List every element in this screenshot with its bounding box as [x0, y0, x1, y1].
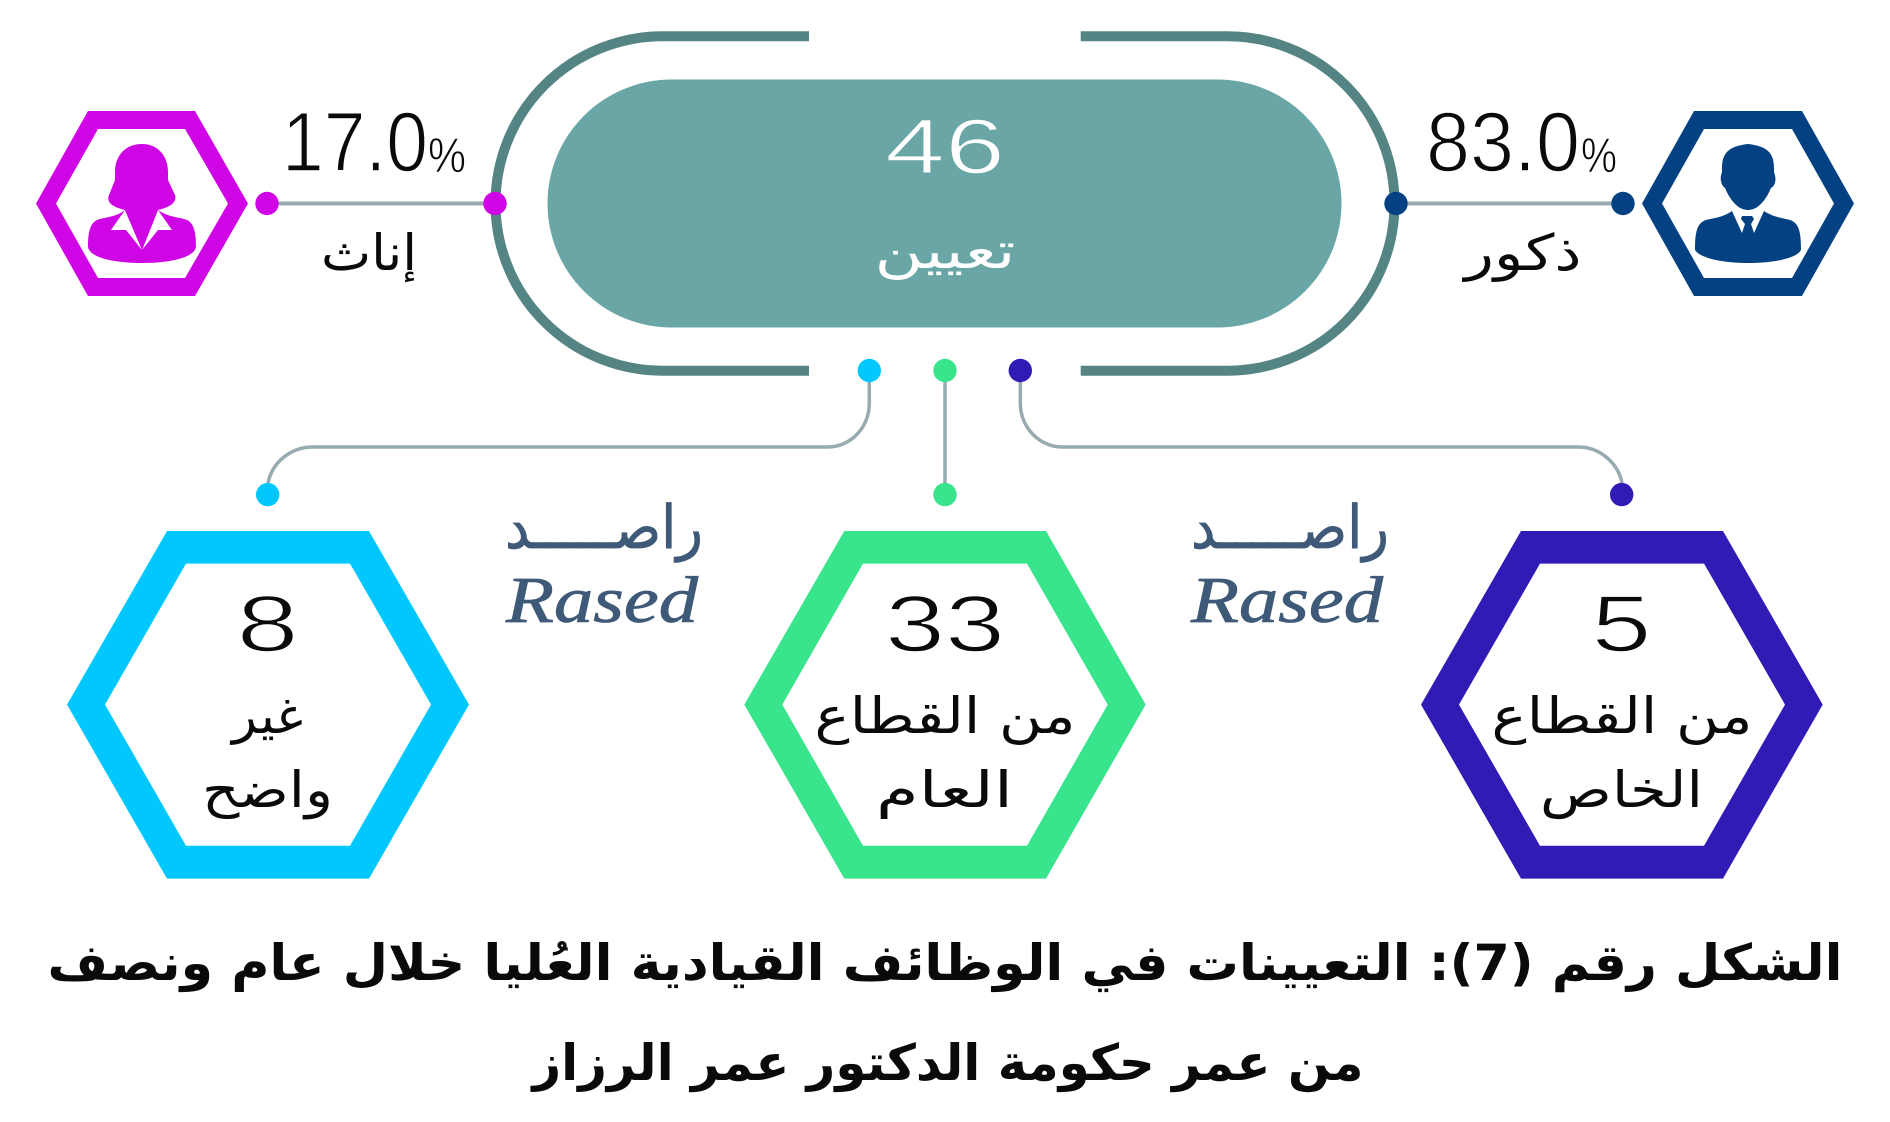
central pill	[548, 80, 1342, 328]
panel: public sector	[744, 531, 1146, 879]
connector dots	[256, 359, 1633, 506]
caption: من عمر حكومة الدكتور عمر الرزاز	[530, 1034, 1364, 1093]
connector line	[267, 202, 495, 206]
female label: إناث	[321, 224, 417, 283]
panel: female share	[36, 95, 507, 296]
label: الخاص	[1540, 761, 1703, 819]
connector lines	[268, 370, 1622, 495]
connector dots	[1384, 192, 1635, 215]
watermark: Rased right: راصـــــد	[1191, 493, 1389, 563]
caption	[48, 934, 1842, 1093]
connector dots	[255, 192, 507, 215]
icon: businesswoman	[88, 144, 196, 263]
female percentage: 17.0	[282, 95, 428, 189]
label	[814, 687, 1076, 819]
icon: male hexagon	[1642, 111, 1854, 296]
panel: private sector	[1421, 531, 1823, 879]
label: من القطاع	[1492, 687, 1752, 745]
panel: central total	[496, 36, 1395, 371]
female percentage: %	[428, 129, 466, 183]
panel: unspecified sector	[67, 531, 469, 879]
label	[1492, 687, 1752, 819]
number 33: 33	[885, 579, 1005, 668]
total number: 46	[885, 102, 1005, 190]
watermark: Rased left	[505, 493, 703, 637]
label	[202, 687, 333, 820]
male percentage: 83.0	[1426, 95, 1580, 189]
connector line	[1396, 202, 1623, 206]
indigo hexagon	[1421, 531, 1823, 879]
label: غير	[229, 687, 303, 745]
icon: businessman	[1695, 144, 1801, 263]
number 8: 8	[237, 579, 299, 668]
male label: ذكور	[1461, 224, 1582, 282]
cyan hexagon	[67, 531, 469, 879]
watermark: Rased left: Rased	[505, 564, 699, 637]
number 5: 5	[1592, 579, 1652, 668]
total label: تعيين	[874, 222, 1016, 280]
label: العام	[876, 761, 1013, 819]
watermark: Rased right	[1190, 493, 1389, 637]
label: من القطاع	[814, 687, 1076, 745]
green hexagon	[744, 531, 1146, 879]
icon: female hexagon	[36, 111, 248, 296]
watermark: Rased right: Rased	[1190, 564, 1384, 637]
male percentage: %	[1581, 129, 1617, 183]
caption: الشكل رقم (7): التعيينات في الوظائف القيادية العُليا خلال عام ونصف	[48, 934, 1842, 993]
outer rounded frame	[496, 36, 1395, 371]
watermark: Rased left: راصـــــد	[505, 493, 703, 563]
panel: male share	[1384, 95, 1854, 296]
connectors to sector hexagons	[256, 359, 1633, 506]
label: واضح	[202, 761, 333, 820]
